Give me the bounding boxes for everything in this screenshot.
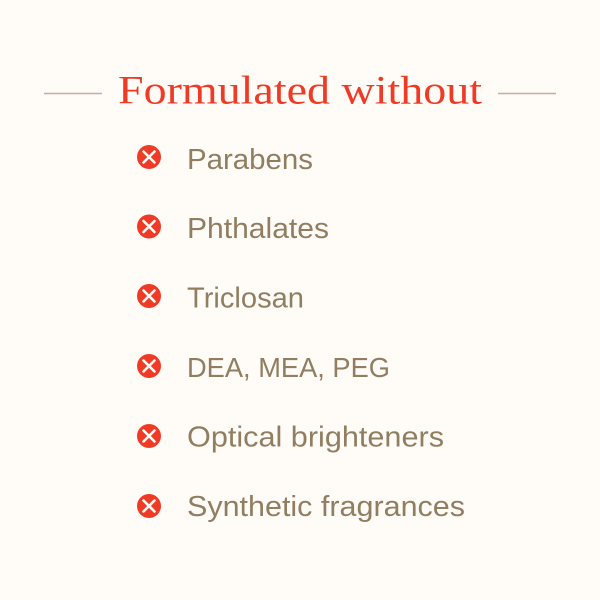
list item: Triclosan: Triclosan [187,282,304,314]
heading: Formulated without: Formulated without [118,68,482,112]
icon: red cross [137,284,161,308]
list item: Parabens: Parabens [187,144,313,176]
list item: Triclosan [137,282,304,314]
icon: red cross [137,494,161,518]
icon: red cross [137,354,161,378]
icon: red cross [137,145,161,169]
icon: red cross [137,424,161,448]
list item: Synthetic fragrances: Synthetic fragrances [187,491,465,523]
list item: Parabens [137,144,313,176]
list item: Phthalates: Phthalates [187,213,329,245]
list item: DEA, MEA, PEG: DEA, MEA, PEG [187,352,390,383]
list: excluded ingredients [137,144,465,523]
icon: red cross [137,214,161,238]
list item: Optical brighteners: Optical brighteners [187,422,444,454]
